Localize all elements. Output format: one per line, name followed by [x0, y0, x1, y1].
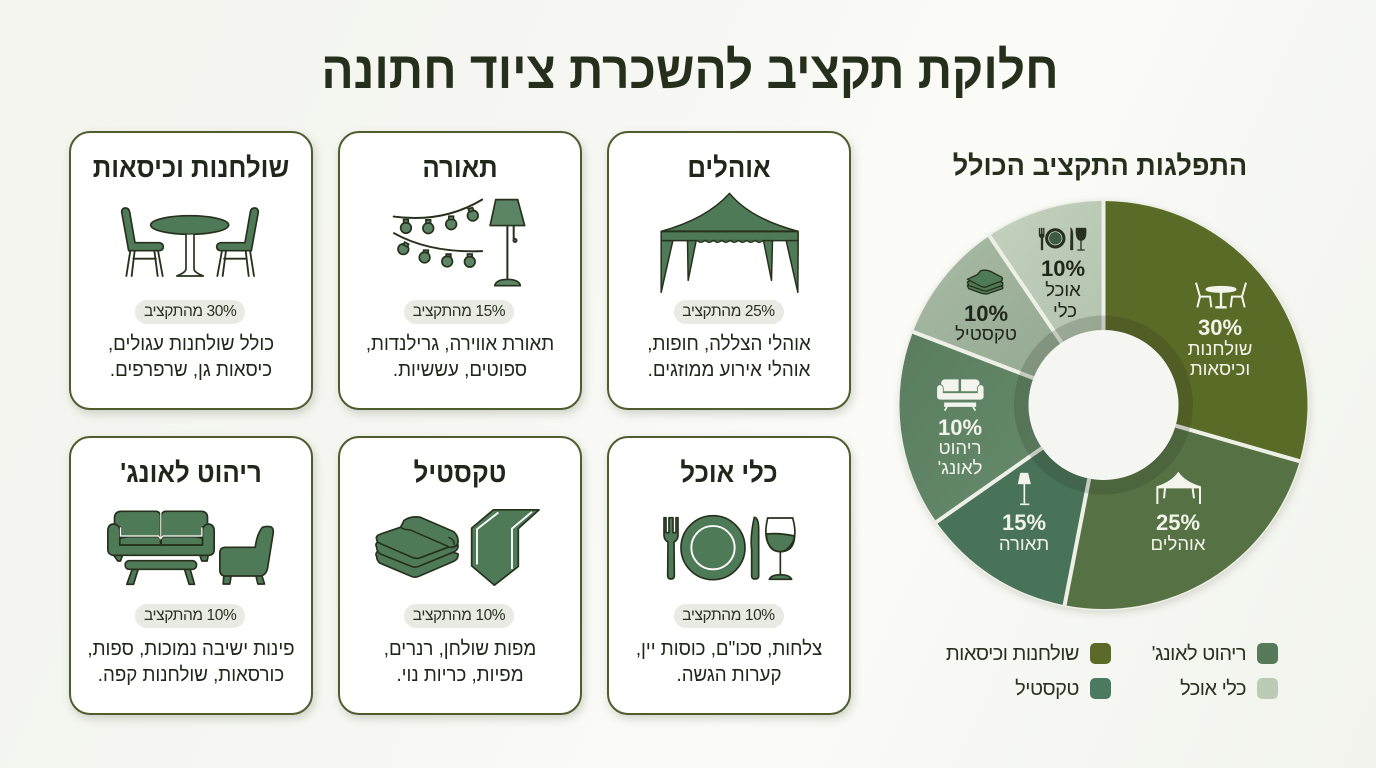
icon: folded linens mini: [967, 270, 1003, 294]
description: tents: אוהלי אירוע ממוזגים.: [648, 358, 810, 380]
heading: tents: אוהלים: [687, 152, 771, 182]
label: lounge: [938, 415, 982, 478]
label: tables and chairs: שולחנות: [1188, 338, 1252, 359]
label: lighting: 15%: [1002, 510, 1046, 535]
description: textile: מפיות, כריות נוי.: [396, 664, 523, 686]
legend swatch: textile: [1090, 678, 1111, 699]
badge: 10%: [404, 604, 514, 628]
legend label: tableware: כלי אוכל: [1180, 678, 1246, 700]
label: tents: 25%: [1156, 510, 1200, 535]
heading: lighting: תאורה: [422, 152, 497, 182]
description: lighting: [365, 332, 554, 380]
badge: 10%: [674, 604, 784, 628]
description: textile: מפות שולחן, רנרים,: [383, 638, 536, 660]
description: lighting: ספוטים, עששיות.: [392, 358, 527, 380]
description: tables and chairs: כיסאות גן, שרפרפים.: [110, 358, 272, 380]
label: tables and chairs: וכיסאות: [1190, 358, 1250, 379]
label: tableware: 10%: [1041, 256, 1085, 281]
badge: 25%: [674, 300, 784, 324]
description: lighting: תאורת אווירה, גרילנדות,: [365, 332, 554, 354]
description: tents: [647, 332, 811, 380]
description: tableware: [636, 638, 822, 686]
label: textile: טקסטיל: [955, 323, 1017, 344]
legend label: tables and chairs: שולחנות וכיסאות: [946, 643, 1079, 665]
icon: sofa mini: [937, 379, 984, 411]
description: tableware: קערות הגשה.: [677, 664, 781, 686]
panel: tableware: [607, 436, 851, 715]
label: tents: אוהלים: [1151, 533, 1206, 554]
label: lounge: 10%: [938, 415, 982, 440]
badge: 10%: 10% מהתקציב: [144, 607, 236, 624]
badge: 10%: 10% מהתקציב: [682, 607, 775, 624]
badge: 30%: [135, 300, 245, 324]
heading: lounge furniture: ריהוט לאונג': [120, 456, 262, 488]
panel: lounge furniture: [69, 436, 313, 715]
icon: tent mini: [1157, 473, 1201, 504]
label: tables and chairs: [1188, 315, 1252, 379]
label: lighting: [999, 510, 1049, 554]
label: lounge: ריהוט: [939, 437, 981, 458]
icon: table mini: [1196, 283, 1246, 307]
icon: string lights and floor lamp: [392, 198, 526, 286]
wedge: tables and chairs 30%: [1104, 201, 1307, 461]
icon: place setting: [663, 514, 796, 580]
label: tableware: [1041, 256, 1085, 321]
label: tableware: אוכל: [1045, 279, 1081, 300]
wedge: tents 25%: [1065, 426, 1300, 609]
description: lounge furniture: פינות ישיבה נמוכות, ספות,: [87, 638, 294, 660]
legend label: textile: טקסטיל: [1015, 678, 1079, 700]
wedge: textile 10%: [913, 236, 1062, 378]
badge: 15%: [404, 300, 514, 324]
donut chart: [896, 200, 1313, 616]
heading: textile: טקסטיל: [413, 456, 506, 488]
wedge: tableware 10%: [989, 201, 1104, 343]
panel: lighting: [338, 131, 582, 410]
heading: tableware: כלי אוכל: [680, 456, 778, 488]
panel: tables and chairs: [69, 131, 313, 410]
badge: 30%: 30% מהתקציב: [144, 302, 236, 320]
panel: textile: [338, 436, 582, 715]
label: tents: [1151, 510, 1206, 554]
description: tables and chairs: [108, 332, 274, 380]
legend swatch: tables and chairs: [1090, 643, 1111, 664]
icon: lamp mini: [1018, 473, 1031, 504]
label: tableware: כלי: [1053, 300, 1077, 321]
label: lighting: תאורה: [999, 533, 1049, 554]
description: tents: אוהלי הצללה, חופות,: [647, 332, 811, 354]
wedge: lighting 15%: [936, 448, 1089, 605]
panel: tents: [607, 131, 851, 410]
label: tables and chairs: 30%: [1198, 315, 1242, 340]
description: tables and chairs: כולל שולחנות עגולים,: [108, 332, 274, 354]
badge: 10%: 10% מהתקציב: [413, 607, 505, 624]
icon: tent: [660, 192, 799, 294]
legend swatch: lounge: [1257, 643, 1278, 664]
badge: 10%: [135, 604, 245, 628]
label: textile: 10%: [964, 301, 1008, 326]
icon: sofa, armchair and coffee table: [107, 510, 274, 586]
badge: 25%: 25% מהתקציב: [682, 302, 775, 320]
title: חלוקת תקציב להשכרת ציוד חתונה: [321, 42, 1059, 100]
legend swatch: tableware: [1257, 678, 1278, 699]
chart heading: התפלגות התקציב הכולל: [953, 150, 1247, 181]
label: lounge: לאונג': [938, 457, 982, 478]
description: lounge furniture: כורסאות, שולחנות קפה.: [97, 664, 284, 686]
description: textile: [383, 638, 536, 686]
legend label: lounge: ריהוט לאונג': [1152, 643, 1246, 665]
description: tableware: צלחות, סכו"ם, כוסות יין,: [636, 638, 822, 660]
wedge: lounge 10%: [899, 332, 1042, 522]
icon: folded linens and table runner: [375, 509, 540, 586]
badge: 15%: 15% מהתקציב: [413, 302, 505, 320]
heading: tables and chairs: שולחנות וכיסאות: [92, 152, 289, 182]
icon: table and chairs: [120, 207, 260, 277]
legend: [946, 643, 1278, 700]
label: textile: [955, 301, 1017, 344]
icon: place setting mini: [1039, 227, 1086, 250]
description: lounge furniture: [87, 638, 294, 686]
